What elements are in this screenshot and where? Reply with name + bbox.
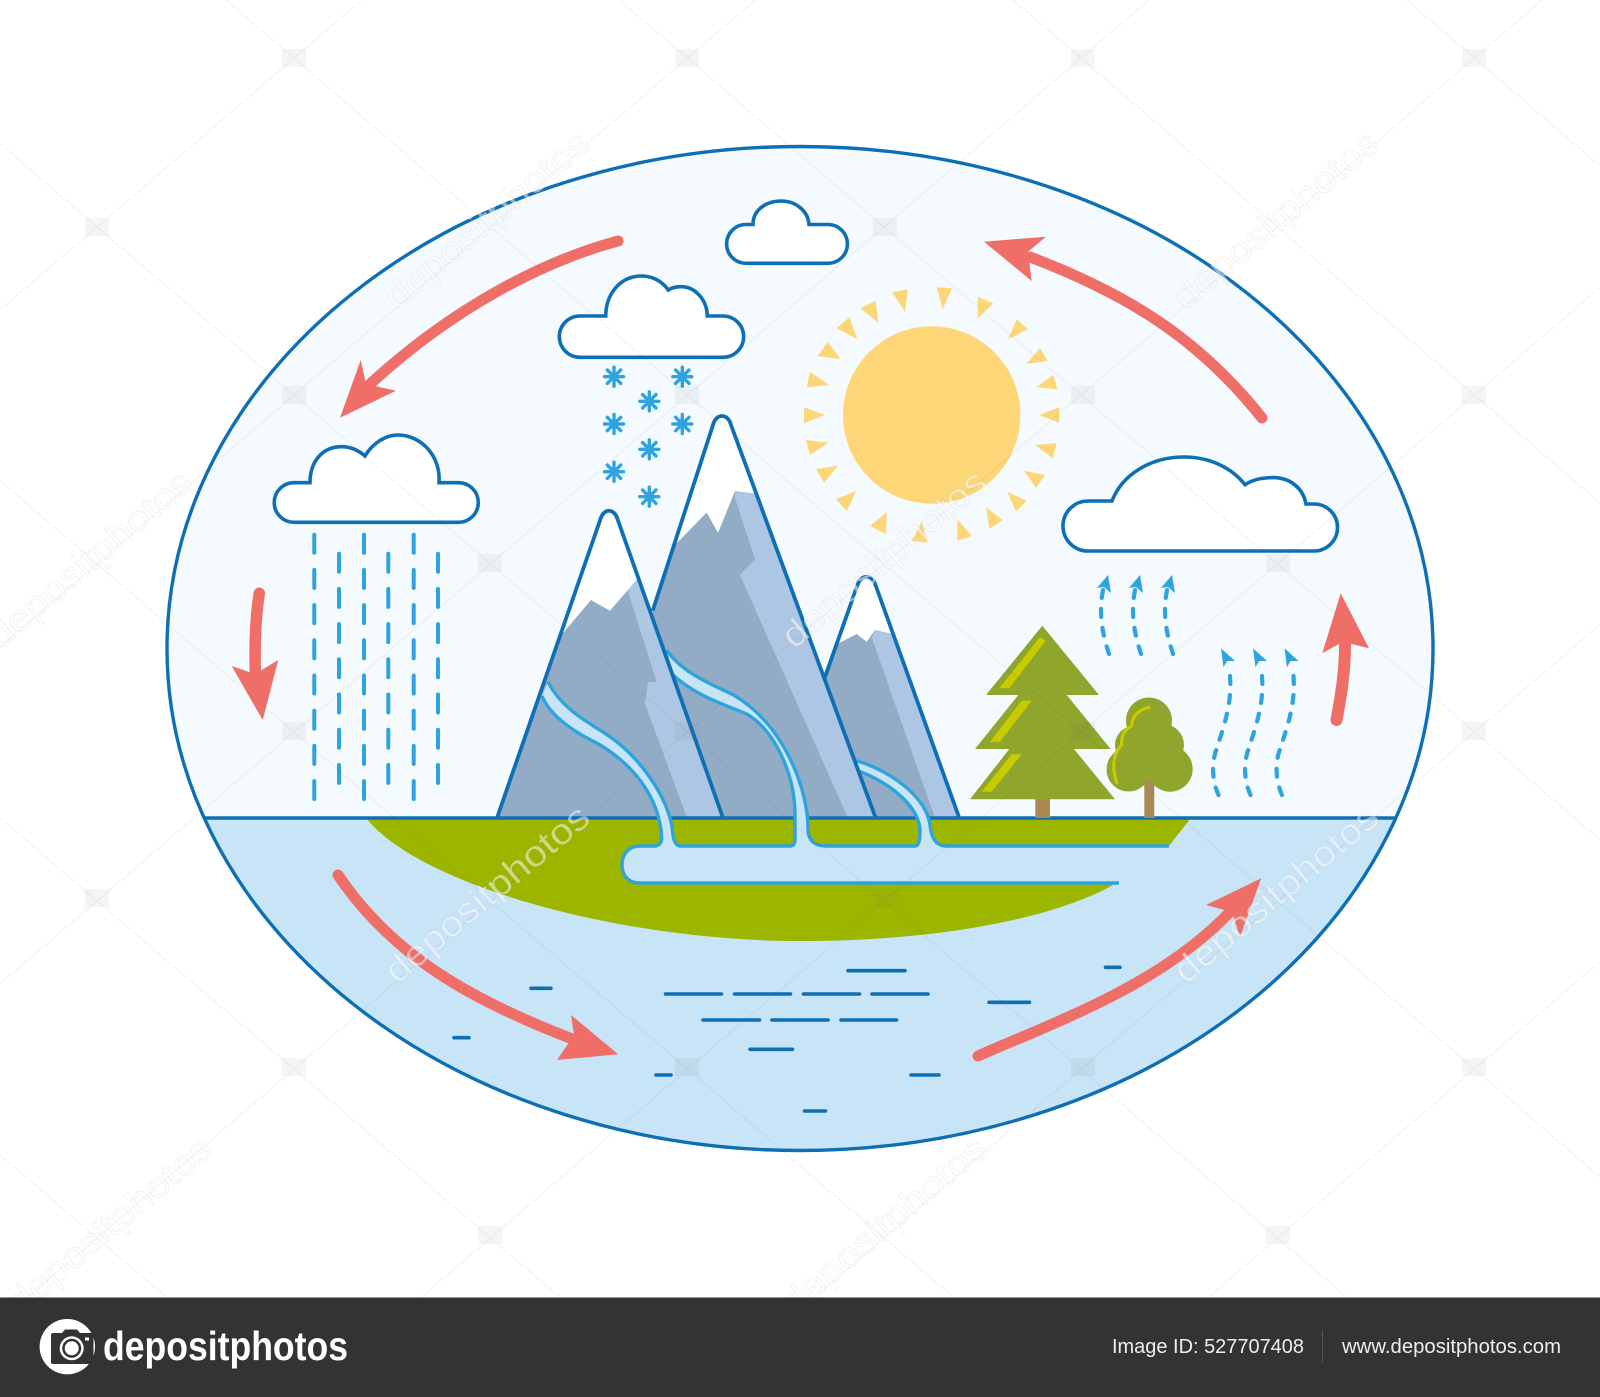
island land [367, 819, 1190, 941]
footer bar [0, 1298, 1600, 1397]
panel: sea [204, 818, 1396, 1151]
watermark camera icons [85, 49, 1486, 1244]
cloud: top small [727, 201, 847, 263]
pine tree [970, 626, 1115, 818]
round tree [1106, 698, 1193, 818]
arrow: top right cycle [984, 237, 1262, 418]
rain dashes [314, 535, 438, 799]
mountain outlines [497, 416, 959, 818]
watermark text: depositphotos [1165, 122, 1386, 317]
cloud: rain cloud [274, 435, 478, 522]
arrow: bottom left cycle [338, 875, 618, 1060]
river and lake [542, 650, 1169, 883]
watermark text [0, 122, 1386, 1322]
cloud: right evaporation cloud [1063, 457, 1337, 551]
mountain: centre [640, 416, 876, 818]
water surface dashes [454, 967, 1120, 1111]
website: www.depositphotos.com [1341, 1336, 1561, 1358]
mountain: left [497, 511, 723, 818]
arrow: left downward [232, 593, 278, 720]
horizon line [204, 816, 1396, 820]
watermark text: depositphotos [1165, 796, 1386, 991]
divider [1322, 1330, 1323, 1362]
watermark text: depositphotos [773, 461, 994, 656]
arrow: bottom right cycle [978, 878, 1261, 1056]
icon: snowflakes [604, 367, 692, 506]
logo: camera badge [40, 1319, 95, 1374]
arrow: right upward [1322, 593, 1369, 720]
logo: wordmark: depositphotos [103, 1323, 348, 1369]
watermark text: depositphotos [376, 122, 597, 317]
mountain: right [790, 577, 960, 818]
arrow: top left cycle [340, 241, 618, 418]
panel: sky ellipse [167, 146, 1433, 1150]
watermark text: depositphotos [773, 1127, 994, 1322]
image id: Image ID: 527707408 [1112, 1336, 1304, 1358]
watermark text: depositphotos [376, 796, 597, 991]
icon: sun [804, 287, 1059, 543]
ellipse outline [167, 146, 1433, 1150]
evaporation arrows: upper [1097, 575, 1175, 654]
cloud: snow cloud [559, 276, 744, 357]
evaporation arrows: lower [1213, 648, 1298, 795]
watermark text: depositphotos [0, 1127, 220, 1322]
